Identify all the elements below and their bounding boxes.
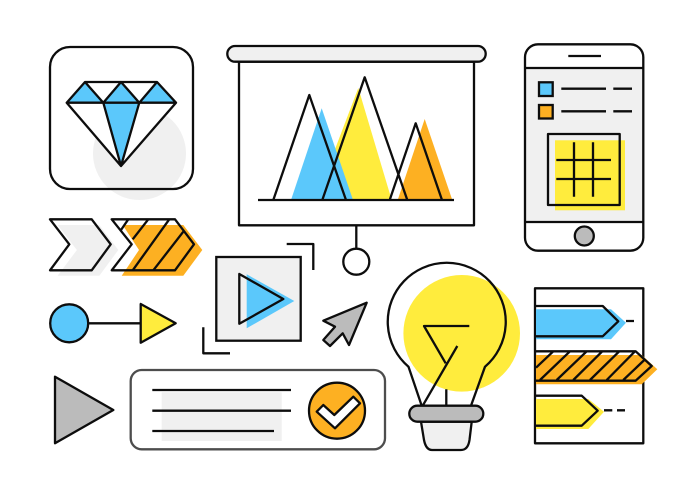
panel: checklist card [131,370,385,449]
bar: hatched orange [535,351,657,384]
icon: smartphone [525,44,643,251]
bar: yellow [535,396,625,429]
icon: diamond [50,47,193,200]
home button [575,226,594,246]
icon: play button with corner brackets [203,244,313,353]
pull cord [343,225,369,275]
icon: grey chevron [50,219,118,276]
icon: cursor arrow [323,303,367,346]
panel: arrow bar chart [535,288,657,443]
bar: blue [535,306,634,339]
icon: presentation screen with mountain chart [227,46,486,275]
icon: circle to triangle connector [50,304,176,343]
mountain chart [258,77,454,200]
icon: light bulb [388,263,520,450]
grid card [548,134,625,210]
icon: check badge [309,383,365,439]
icon: hatched orange chevron [112,219,202,276]
list rows [539,82,632,118]
icon: grey triangle [55,377,113,443]
screen frame [239,62,474,225]
screen roller [227,46,486,62]
